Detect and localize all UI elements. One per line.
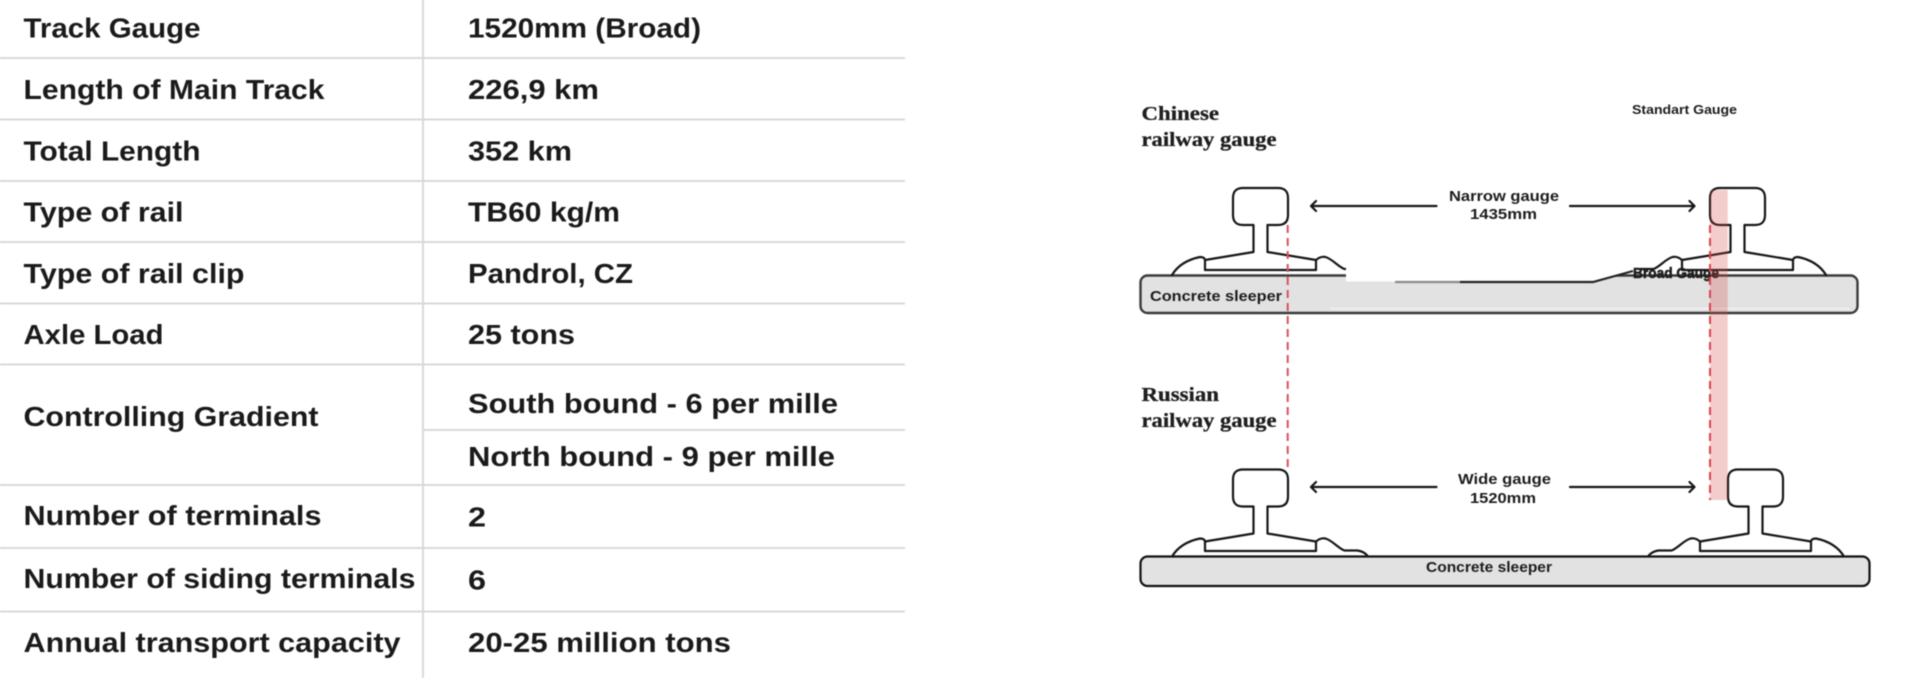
Russian left rail bbox=[1172, 470, 1368, 556]
dashed red guide: right bbox=[1709, 225, 1711, 500]
row: length of main track: Length of Main Track bbox=[24, 74, 325, 105]
heading: Chinese railway gauge bbox=[1142, 103, 1276, 151]
row: controlling gradient: Controlling Gradient bbox=[24, 401, 318, 432]
arrow: wide gauge right bbox=[1570, 482, 1694, 492]
row: controlling gradient bbox=[24, 388, 838, 472]
heading: Russian railway gauge: railway gauge bbox=[1142, 410, 1276, 432]
label: Wide gauge 1520mm: 1520mm bbox=[1470, 490, 1536, 507]
label: Narrow gauge 1435mm: 1435mm bbox=[1470, 206, 1537, 223]
white erased area over the sleeper bbox=[1346, 258, 1633, 282]
arrow: wide gauge left bbox=[1311, 482, 1436, 492]
row: number of terminals: 2 bbox=[468, 502, 486, 532]
heading: Russian railway gauge: Russian bbox=[1142, 384, 1220, 406]
heading: Chinese railway gauge: railway gauge bbox=[1142, 129, 1276, 151]
arrow: narrow gauge right bbox=[1570, 201, 1694, 211]
row: axle load bbox=[24, 319, 575, 350]
panel: gauge comparison diagram bbox=[1140, 103, 1870, 586]
row: axle load: 25 tons bbox=[468, 319, 575, 350]
Russian concrete sleeper bbox=[1140, 556, 1870, 586]
arrow: narrow gauge left bbox=[1311, 201, 1436, 211]
row: type of rail: Type of rail bbox=[24, 196, 184, 228]
Chinese concrete sleeper bbox=[1140, 276, 1858, 313]
row: controlling gradient: North bound - 9 per mille bbox=[468, 441, 835, 472]
panel: specifications table bbox=[0, 0, 906, 678]
heading: Chinese railway gauge: Chinese bbox=[1142, 103, 1219, 125]
label: Wide gauge 1520mm: Wide gauge bbox=[1458, 471, 1551, 488]
sleeper edge redraw bbox=[1395, 271, 1633, 282]
label: Concrete sleeper (Russian): Concrete sleeper bbox=[1426, 559, 1552, 576]
row: track gauge: Track Gauge bbox=[24, 12, 201, 44]
row: number of siding terminals: 6 bbox=[468, 564, 486, 596]
label: Wide gauge 1520mm bbox=[1458, 471, 1551, 507]
row: track gauge: 1520mm (Broad) bbox=[468, 12, 701, 44]
row: total length: 352 km bbox=[468, 136, 572, 166]
Chinese left rail bbox=[1172, 188, 1368, 275]
gauge difference band bbox=[1710, 190, 1728, 500]
row: controlling gradient: South bound - 6 per mille bbox=[468, 388, 838, 419]
Chinese right rail bbox=[1640, 188, 1826, 275]
row: number of terminals: Number of terminals bbox=[24, 500, 322, 531]
row: axle load: Axle Load bbox=[24, 319, 164, 350]
dashed red guide: left bbox=[1287, 225, 1289, 468]
row: type of rail bbox=[24, 196, 620, 228]
label: Broad Gauge: Broad Gauge bbox=[1633, 265, 1719, 282]
row: annual transport capacity: Annual transport capacity bbox=[24, 627, 401, 658]
row: type of rail clip bbox=[24, 258, 633, 289]
label: Standart Gauge: Standart Gauge bbox=[1632, 103, 1737, 117]
row: number of terminals bbox=[24, 500, 486, 532]
row: type of rail clip: Type of rail clip bbox=[24, 258, 245, 289]
row: length of main track bbox=[24, 74, 599, 105]
label: Narrow gauge 1435mm bbox=[1449, 188, 1559, 223]
row: length of main track: 226,9 km bbox=[468, 74, 599, 105]
row: track gauge bbox=[24, 12, 701, 44]
row: annual transport capacity: 20-25 million tons bbox=[468, 627, 731, 658]
row: annual transport capacity bbox=[24, 627, 731, 658]
row: total length bbox=[24, 136, 572, 166]
Russian right rail bbox=[1648, 470, 1844, 556]
row: type of rail clip: Pandrol, CZ bbox=[468, 258, 633, 289]
row: type of rail: TB60 kg/m bbox=[468, 196, 620, 228]
row: total length: Total Length bbox=[24, 136, 200, 166]
label: Concrete sleeper (Chinese): Concrete sleeper bbox=[1150, 288, 1282, 305]
row: number of siding terminals: Number of siding terminals bbox=[24, 563, 416, 594]
label: Narrow gauge 1435mm: Narrow gauge bbox=[1449, 188, 1559, 205]
heading: Russian railway gauge bbox=[1142, 384, 1276, 432]
